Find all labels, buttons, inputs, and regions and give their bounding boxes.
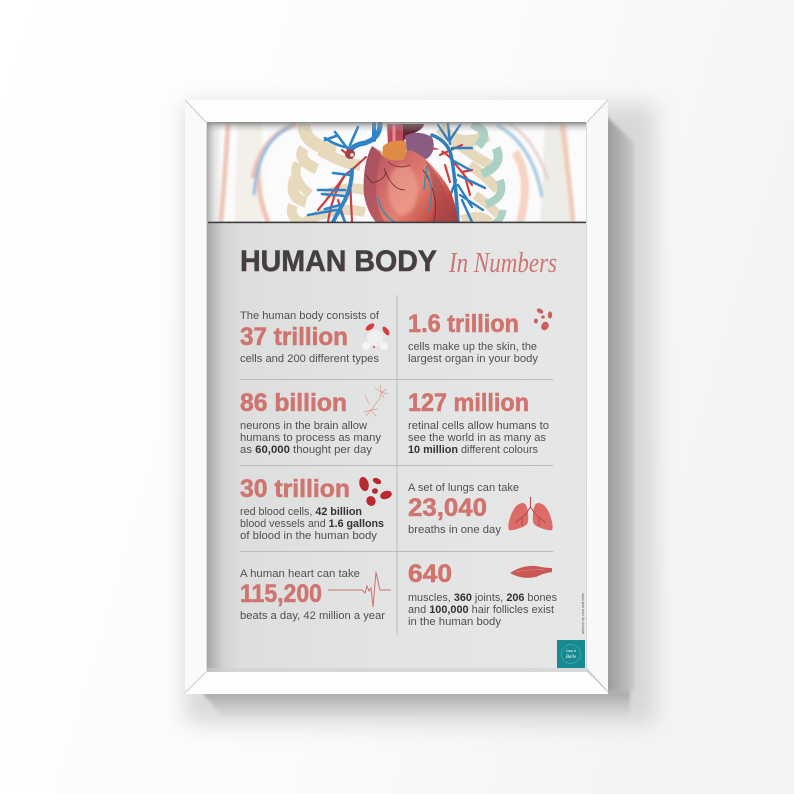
panel backdrop: [207, 122, 586, 222]
title: [240, 245, 557, 279]
frame: [185, 100, 608, 694]
stat: 1.6 trillion: largest organ in your body: [408, 353, 539, 365]
stat: 115,200: 115,200: [240, 580, 322, 608]
logo badge: Cara &: [566, 649, 577, 653]
icon: skin cells: [534, 307, 552, 332]
lung veins right: [432, 124, 485, 222]
stat: 30 trillion: of blood in the human body: [240, 530, 378, 542]
stat: 37 trillion: [240, 310, 380, 365]
stat: 86 billion: humans to process as many: [240, 432, 381, 444]
coronary vessels: [366, 162, 436, 222]
icon: cells: [362, 322, 391, 350]
logo badge: [557, 640, 585, 668]
stat: 115,200: [240, 568, 385, 622]
lung spot: [345, 149, 355, 159]
vertical credit text: artwork by cara and belle: [581, 593, 585, 634]
stat: 23,040: [408, 482, 519, 536]
title: in numbers: In Numbers: [448, 247, 557, 279]
stat: 640: 640: [408, 560, 452, 588]
stat: 127 million: [408, 389, 549, 456]
stat: 115,200: A human heart can take: [240, 568, 360, 580]
lung veins left: [308, 124, 380, 222]
aortic stripe: [392, 124, 396, 142]
stat: 23,040: breaths in one day: [408, 524, 502, 536]
stat: 1.6 trillion: cells make up the skin, the: [408, 341, 537, 353]
lung arteries right: [430, 145, 472, 195]
ribs left: [292, 124, 365, 224]
stat: 37 trillion: The human body consists of: [240, 310, 380, 322]
stat: 127 million: see the world in as many as: [408, 432, 546, 444]
left ventricle shade: [364, 146, 386, 224]
right frame shadow: [600, 110, 634, 694]
stat: 86 billion: [240, 389, 381, 456]
stat: 30 trillion: red blood cells, 42 billion: [240, 506, 362, 518]
stat: 640: muscles, 360 joints, 206 bones: [408, 592, 557, 604]
frame right: [587, 100, 608, 692]
stat: 86 billion: neurons in the brain allow: [240, 420, 367, 432]
icon: red blood cells: [358, 476, 393, 508]
rib tint right: [472, 124, 503, 225]
aorta: [387, 124, 403, 143]
grid dividers: [240, 295, 553, 635]
stat: 23,040: 23,040: [408, 494, 487, 522]
framed poster mockup: [174, 0, 794, 794]
stat: 86 billion: as 60,000 thought per day: [240, 444, 373, 456]
title: human body: HUMAN BODY: [240, 245, 437, 278]
coronary veins: [378, 166, 432, 224]
lung arteries left: [318, 150, 366, 222]
inner left shadow: [207, 122, 222, 222]
heart body: [364, 146, 458, 224]
stat: 30 trillion: 30 trillion: [240, 475, 350, 503]
pulmonary trunk: [405, 133, 434, 162]
frame left: [185, 100, 206, 693]
inner bottom lip: [207, 668, 586, 672]
stat: 37 trillion: cells and 200 different types: [240, 353, 380, 365]
stat: 640: and 100,000 hair follicles exist: [408, 604, 554, 616]
panel divider: [208, 222, 586, 223]
right ventricle shade: [425, 160, 451, 222]
stat: 127 million: 127 million: [408, 389, 529, 417]
ribs right: [440, 128, 498, 222]
stat: 37 trillion: 37 trillion: [240, 323, 348, 351]
vessel top: [403, 124, 424, 142]
stat: 127 million: retinal cells allow humans to: [408, 420, 549, 432]
frame bottom: [185, 672, 608, 694]
icon: heartbeat line: [328, 572, 391, 607]
stat: 23,040: A set of lungs can take: [408, 482, 519, 494]
frame top: [185, 100, 608, 122]
heart highlight: [388, 165, 418, 215]
heart illustration panel: [207, 122, 586, 225]
rib cage: [292, 124, 503, 225]
arms: [221, 122, 573, 222]
stat: 30 trillion: blood vessels and 1.6 gallons: [240, 518, 384, 530]
icon: neuron: [364, 385, 388, 416]
icon: lungs: [508, 497, 553, 530]
stat: 115,200: beats a day, 42 million a year: [240, 610, 385, 622]
poster paper: [207, 122, 586, 672]
stat: 1.6 trillion: [408, 310, 539, 365]
stat: 1.6 trillion: 1.6 trillion: [408, 310, 519, 338]
logo badge: Belle: [566, 655, 577, 660]
icon: muscle: [510, 566, 552, 578]
bottom frame shadow: [200, 690, 630, 716]
thymus: [382, 141, 407, 160]
soft halo around frame: [185, 104, 655, 724]
stat: 640: in the human body: [408, 616, 502, 628]
stat: 127 million: 10 million different colours: [408, 444, 538, 456]
stat: 30 trillion: [240, 475, 384, 542]
stat: 640: [408, 560, 557, 628]
white gaps: [433, 149, 442, 152]
stat: 86 billion: 86 billion: [240, 389, 347, 417]
vessels and heart: [308, 124, 485, 224]
inner top shadow: [207, 122, 586, 132]
